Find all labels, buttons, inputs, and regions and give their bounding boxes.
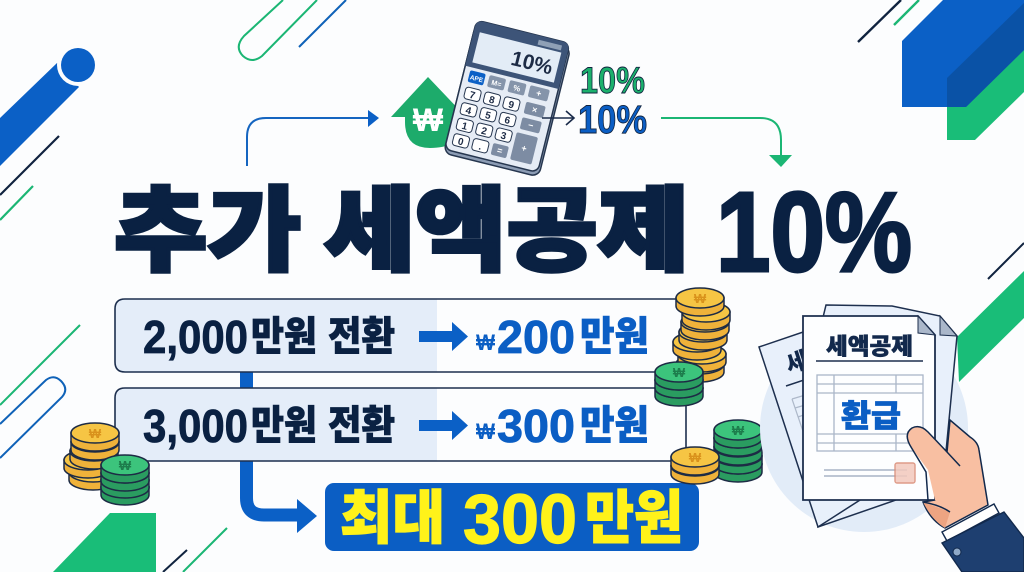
blue connector arrow [240,370,317,533]
back paper right [803,305,957,527]
icon: calculator: = [496,145,504,156]
decoration: right-side stripe [957,243,1024,382]
icon: calculator: 4 [464,105,473,117]
row label: 3,000 [143,400,248,452]
decoration: top-right blocks [858,0,1024,140]
text: green 10 percent: 10% [580,60,645,101]
row amount: 200 [497,311,575,363]
row amount: 만원 [580,304,649,362]
row amount [497,304,649,363]
arrow: blue flow arrow to calculator [247,110,379,166]
decoration: bottom-left shape [53,513,227,572]
icon: lower-right coin stacks [671,420,762,484]
icon: top-right coin stacks: ₩ [694,291,707,306]
icon: left coin stacks [64,423,149,505]
icon: calculator: 7 [468,90,477,102]
back paper left: 세 [780,341,812,381]
arrow: green flow arrow to title [661,118,792,167]
row amount: 만원 [580,393,649,451]
row arrow [419,322,468,351]
row won sign: ₩ [476,419,495,444]
icon: calculator: 5 [484,110,492,122]
icon: green up arrow with won sign: ₩ [413,102,444,138]
document title: 세액공제 [826,327,913,361]
icon: calculator: 6 [503,115,512,127]
decoration: left-side lines [0,325,80,458]
title: 세액공제 [324,157,689,290]
row label [143,393,395,452]
icon: refund documents and hand [759,305,1024,572]
icon: calculator: % [512,83,521,94]
row label: 만원 [251,304,317,362]
icon: calculator: − [527,120,535,131]
title: 10% [716,169,912,295]
panel: 3,000 row [115,388,686,461]
row label: 전환 [328,393,395,451]
icon: calculator: + [535,88,543,99]
icon: calculator: 2 [480,126,488,138]
title [114,157,912,295]
icon: calculator: 1 [460,121,469,133]
front paper [803,316,935,500]
icon: calculator: 8 [488,95,496,107]
icon: lower-right coin stacks: ₩ [689,450,702,465]
jacket sleeve [942,512,1024,572]
row label [143,304,395,363]
icon: calculator: 0 [457,136,465,148]
icon: calculator: . [477,142,483,153]
shirt cuff [942,504,999,541]
stamp [895,463,915,483]
icon: green up arrow with won sign [391,77,466,148]
hand [907,420,988,528]
row won sign: ₩ [476,330,495,355]
arrow: calculator to percent [542,111,574,125]
icon: calculator: 9 [507,99,515,112]
callout: maximum 3 million won [325,471,699,558]
row arrow [419,411,468,440]
icon: left coin stacks: ₩ [89,426,102,441]
icon: left coin stacks: ₩ [119,458,132,473]
icon: top-right coin stacks: ₩ [673,365,686,380]
icon: calculator: 10% [509,47,555,80]
row amount: 300 [497,400,575,452]
icon: top-right coin stacks [655,288,730,406]
icon: calculator: APE [469,74,484,84]
icon: calculator [444,20,572,177]
icon: calculator: 3 [499,131,508,143]
back paper left [759,329,860,527]
title: 추가 [114,157,301,290]
decoration: top paperclip lines [239,0,346,60]
refund label: 환급 [841,391,901,436]
icon: lower-right coin stacks: ₩ [732,423,745,438]
document table [817,375,923,451]
decoration: top-left blue bar and circle [0,44,99,220]
callout: maximum 3 million won: 최대 [340,471,445,555]
icon: calculator: M= [491,80,502,89]
callout: maximum 3 million won: 만원 [585,471,683,555]
panel: 2,000 row [115,299,680,372]
row label: 만원 [251,393,317,451]
icon: calculator: + [520,143,528,154]
row amount [497,393,649,452]
icon: calculator: × [531,104,538,115]
row label: 2,000 [143,311,248,363]
sleeve button [953,548,961,556]
text: blue 10 percent: 10% [578,98,647,142]
callout: maximum 3 million won: 300 [463,480,577,558]
row label: 전환 [328,304,395,362]
